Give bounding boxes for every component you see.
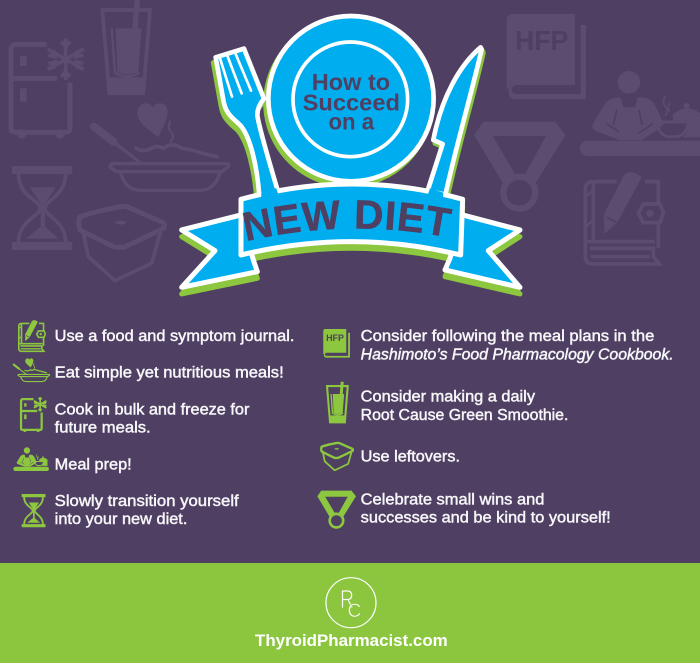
tip: leftovers [321, 443, 460, 470]
plate heading: How to [312, 69, 390, 95]
tip: celebrate wins [317, 491, 611, 527]
icon: HFP cookbook [323, 329, 350, 358]
icon: hourglass [22, 494, 46, 527]
icon: meal bowl [14, 358, 50, 382]
tip: celebrate wins: Celebrate small wins and [361, 491, 544, 508]
tip: cookbook meal plans: Consider following the meal plans in the [361, 328, 654, 345]
icon: faint smoothie glass [102, 0, 150, 95]
tips list: right column [317, 328, 674, 527]
plate heading: on a [328, 108, 375, 134]
tips list: left column [13, 320, 294, 528]
tip: transition slowly: into your new diet. [55, 511, 187, 528]
logo: RC monogram: C [348, 601, 361, 622]
tip: green smoothie: Consider making a daily [361, 389, 535, 406]
tip: simple meals: Eat simple yet nutritious meals! [55, 365, 284, 382]
fork [216, 49, 278, 197]
icon: faint meal bowl [94, 103, 229, 190]
icon: cook [13, 447, 49, 471]
background icon pattern [11, 0, 700, 281]
icon: faint fridge [11, 38, 84, 139]
tip: cook in bulk: future meals. [55, 420, 151, 437]
tip: celebrate wins: successes and be kind to yourself! [361, 510, 611, 527]
knife [427, 47, 482, 197]
title emblem: plate, fork, knife and ribbon [179, 14, 522, 296]
logo: RC monogram: R [340, 584, 354, 614]
icon: faint journal [585, 172, 663, 264]
tip: green smoothie [327, 382, 568, 424]
tip: cook in bulk [21, 397, 249, 437]
icon: faint medal [474, 122, 566, 209]
ribbon heading: new diet: NEW DIET [242, 200, 452, 241]
tip: leftovers: Use leftovers. [361, 449, 460, 466]
icon: faint HFP cookbook [507, 14, 586, 99]
icon: faint hourglass [12, 166, 72, 250]
tip: meal prep [13, 447, 132, 473]
tip: meal prep: Meal prep! [55, 456, 132, 473]
icon: faint cook [580, 71, 700, 156]
footer band [0, 563, 700, 663]
tip: green smoothie: Root Cause Green Smoothie. [361, 407, 568, 424]
tip: simple meals [14, 358, 284, 382]
tip: cook in bulk: Cook in bulk and freeze for [55, 402, 249, 418]
plate [268, 16, 434, 181]
icon: journal [19, 320, 45, 351]
icon: medal [317, 491, 356, 527]
tip: cookbook meal plans: Hashimoto’s Food Pharmacology Cookbook. [361, 346, 674, 363]
ribbon [182, 184, 520, 287]
website address: ThyroidPharmacist.com [255, 631, 448, 650]
icon: leftovers container [321, 443, 353, 470]
tip: journal [19, 320, 294, 351]
icon: smoothie glass [327, 382, 348, 423]
icon: faint HFP cookbook: HFP [515, 25, 568, 56]
icon: faint leftovers container [79, 206, 165, 281]
tip: journal: Use a food and symptom journal. [55, 328, 294, 345]
emblem green shadow [182, 20, 520, 294]
tip: cookbook meal plans [323, 328, 674, 363]
plate heading [303, 69, 400, 134]
icon: HFP cookbook: HFP [326, 332, 344, 343]
icon: fridge [21, 397, 46, 432]
tip: transition slowly [22, 493, 239, 528]
plate heading: Succeed [303, 90, 400, 116]
tip: transition slowly: Slowly transition yourself [55, 493, 239, 510]
logo: RC monogram [326, 578, 376, 628]
